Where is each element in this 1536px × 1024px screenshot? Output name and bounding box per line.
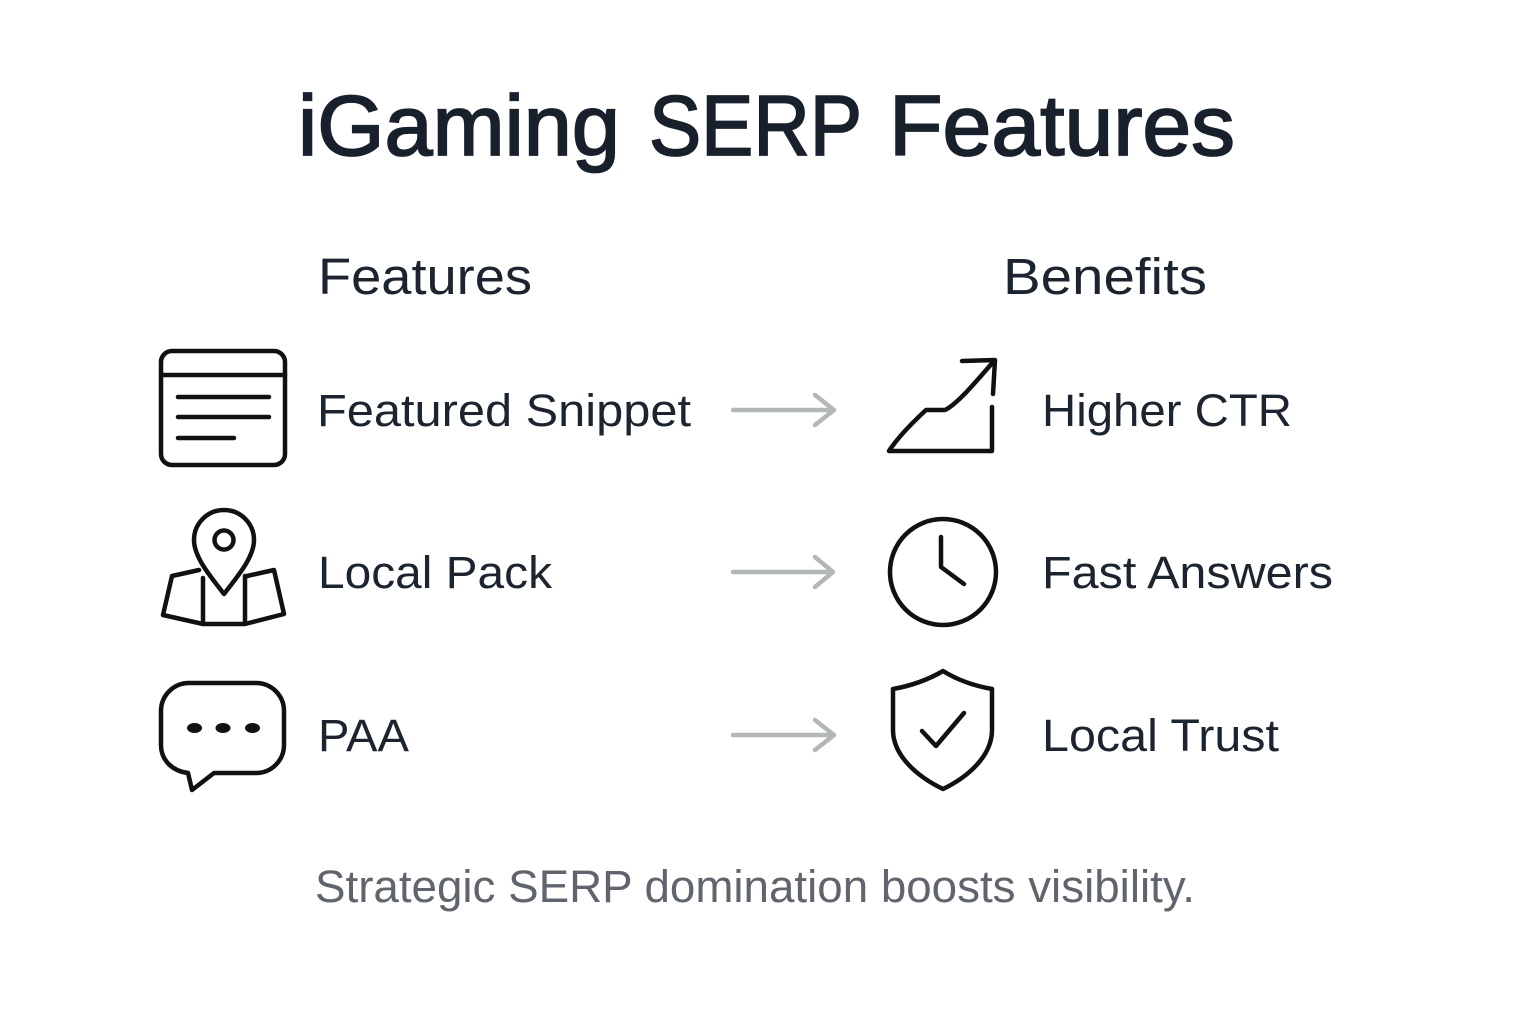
label: local pack: Local Pack (318, 547, 553, 598)
title: Features (889, 79, 1235, 174)
arrow: PAA to local trust (733, 720, 834, 750)
icon: clock (890, 519, 996, 625)
title (298, 79, 1235, 174)
icon: featured snippet (161, 351, 285, 465)
label: higher CTR: Higher CTR (1042, 385, 1292, 436)
icon: higher CTR (889, 360, 995, 451)
title: SERP (649, 79, 862, 174)
label: featured snippet: Featured Snippet (317, 385, 692, 436)
caption: Strategic SERP domination boosts visibility. (315, 861, 1195, 912)
label: fast answers: Fast Answers (1042, 547, 1333, 598)
arrow: local pack to fast answers (733, 557, 833, 587)
label: PAA: PAA (318, 710, 409, 761)
arrow: featured snippet to higher CTR (733, 395, 834, 425)
icon: shield (893, 671, 992, 789)
heading: benefits: Benefits (1003, 248, 1207, 305)
title: iGaming (298, 79, 620, 174)
icon dots: speech bubble (187, 723, 260, 733)
heading: features: Features (318, 248, 532, 305)
icon: speech bubble (161, 683, 284, 790)
label: local trust: Local Trust (1042, 710, 1280, 761)
icon: local pack map pin (163, 510, 284, 624)
